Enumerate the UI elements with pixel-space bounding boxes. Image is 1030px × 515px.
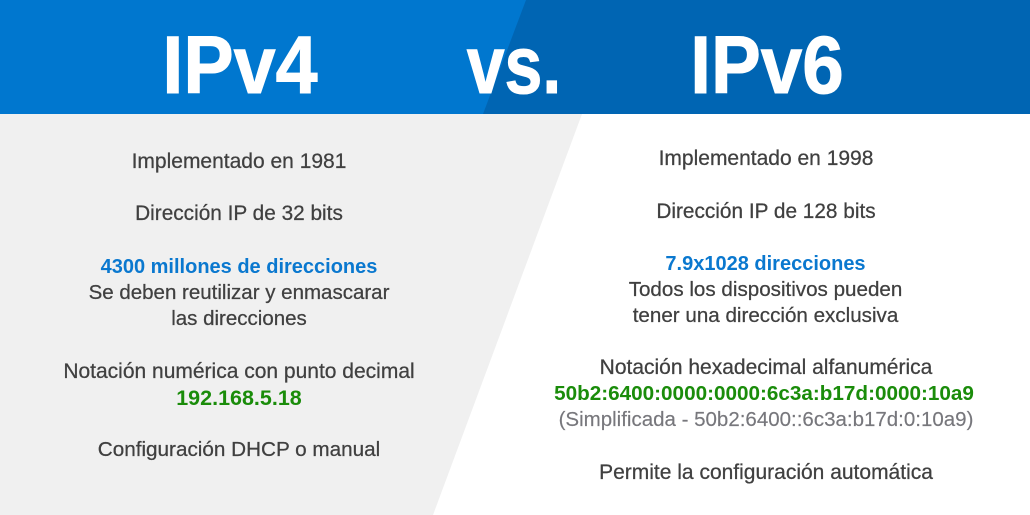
text: IPv6 implementation year: Implementado en 1998 [659,147,873,170]
text: IPv6 notation: Notación hexadecimal alfanumérica [600,356,932,379]
text: IPv6 notation: 50b2:6400:0000:0000:6c3a:b17d:0000:10a9 [554,382,974,405]
text: IPv6 notation [554,356,974,431]
text: IPv4 implementation year: Implementado en 1981 [132,150,346,173]
text: IPv4 notation [63,360,415,410]
heading: IPv6: IPv6 [690,20,843,111]
text: IPv6 address count: 7.9x1028 direcciones [665,253,866,275]
text: IPv6 notation: (Simplificada - 50b2:6400::6c3a:b17d:0:10a9) [559,408,973,431]
text: IPv4 address count: las direcciones [171,307,307,330]
text: IPv4 address size: Dirección IP de 32 bits [135,202,343,225]
text: IPv4 notation: 192.168.5.18 [176,386,302,410]
text: IPv4 address count [89,256,390,330]
heading: vs.: vs. [467,20,561,111]
heading: IPv4: IPv4 [162,20,318,111]
text: IPv4 address count: Se deben reutilizar y enmascarar [89,281,389,304]
text: IPv4 configuration: Configuración DHCP o manual [98,438,380,461]
text: IPv6 address count [629,253,902,327]
text: IPv4 notation: Notación numérica con punto decimal [63,360,415,383]
text: IPv6 address size: Dirección IP de 128 bits [656,200,876,223]
text: IPv6 address count: tener una dirección exclusiva [633,304,898,327]
text: IPv4 address count: 4300 millones de direcciones [101,256,377,278]
text: IPv6 configuration: Permite la configuración automática [599,461,933,484]
text: IPv6 address count: Todos los dispositivos pueden [629,278,902,301]
